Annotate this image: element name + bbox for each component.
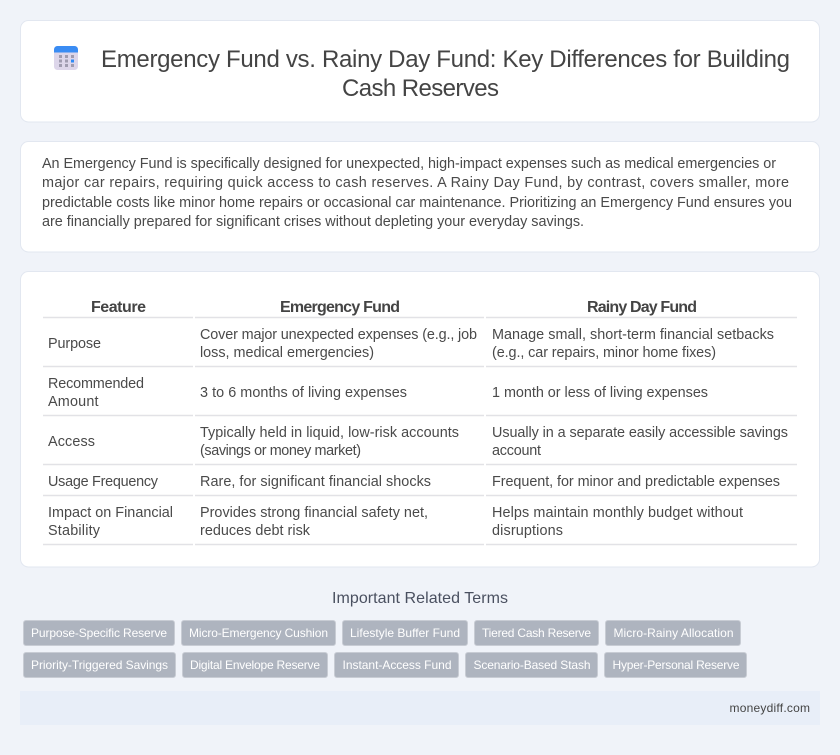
row: usage frequency (48, 474, 780, 490)
chip (334, 652, 458, 678)
chip (182, 620, 336, 646)
chip (604, 652, 746, 678)
footer source text: moneydiff.com (730, 701, 810, 715)
description text: are financially prepared for significant crises without depleting your everyday savings. (42, 214, 584, 230)
title: Emergency Fund vs. Rainy Day Fund: Key Differences for Building (101, 46, 790, 73)
row: access: Usually in a separate easily accessible savings (492, 425, 788, 441)
row: usage frequency: Usage Frequency (48, 474, 159, 490)
description text: An Emergency Fund is specifically designed for unexpected, high-impact expenses such as medical emergencies or (42, 156, 776, 172)
chip (24, 620, 174, 646)
description text: major car repairs, requiring quick access to cash reserves. A Rainy Day Fund, by contrast, covers smaller, more (42, 175, 789, 191)
chip: Instant-Access Fund (342, 658, 452, 672)
chip: Tiered Cash Reserve (482, 626, 591, 640)
row: impact on financial stability: Helps maintain monthly budget without (492, 505, 743, 521)
chip (474, 620, 598, 646)
chip (24, 652, 176, 678)
row: purpose: Cover major unexpected expenses (e.g., job (200, 327, 477, 343)
row: access: account (492, 443, 541, 459)
row: access: Access (48, 434, 95, 450)
chip: Micro-Rainy Allocation (614, 626, 734, 640)
row: recommended amount: Amount (48, 394, 98, 410)
title: Cash Reserves (342, 75, 499, 102)
table header row: Rainy Day Fund (587, 299, 697, 316)
row: impact on financial stability: Provides strong financial safety net, (200, 505, 428, 521)
row: recommended amount: 1 month or less of living expenses (492, 385, 708, 401)
table header row: Emergency Fund (280, 299, 400, 316)
row: purpose (48, 327, 774, 361)
table header row (91, 299, 697, 316)
row: purpose: Manage small, short-term financial setbacks (492, 327, 774, 343)
header panel (20, 20, 820, 122)
chip: Priority-Triggered Savings (31, 658, 168, 672)
row: recommended amount (48, 376, 708, 410)
row: purpose: (e.g., car repairs, minor home fixes) (492, 345, 716, 361)
comparison table panel (20, 272, 820, 567)
chip: Digital Envelope Reserve (190, 658, 320, 672)
row: recommended amount: Recommended (48, 376, 144, 392)
row: impact on financial stability: Impact on Financial (48, 505, 173, 521)
row: access: Typically held in liquid, low-risk accounts (200, 425, 459, 441)
related terms chips (24, 620, 746, 678)
chip (342, 620, 468, 646)
description text (42, 156, 792, 230)
description text: predictable costs like minor home repairs or occasional car maintenance. Prioritizing an Emergency Fund ensures you (42, 195, 792, 211)
row: usage frequency: Frequent, for minor and predictable expenses (492, 474, 780, 490)
heading: important related terms: Important Related Terms (332, 590, 508, 607)
chip: Hyper-Personal Reserve (612, 658, 740, 672)
chip: Purpose-Specific Reserve (31, 626, 167, 640)
chip: Micro-Emergency Cushion (189, 626, 328, 640)
description panel (20, 142, 820, 252)
row: purpose: loss, medical emergencies) (200, 345, 374, 361)
icon: calendar (54, 46, 78, 70)
row: access: (savings or money market) (200, 443, 361, 459)
row: access (48, 425, 788, 459)
table header row: Feature (91, 299, 146, 316)
chip (466, 652, 598, 678)
row: purpose: Purpose (48, 336, 101, 352)
row: recommended amount: 3 to 6 months of living expenses (200, 385, 407, 401)
row: usage frequency: Rare, for significant financial shocks (200, 474, 431, 490)
chip: Scenario-Based Stash (474, 658, 590, 672)
row: impact on financial stability: disruptions (492, 523, 563, 539)
footer band (20, 691, 820, 725)
row: impact on financial stability (48, 505, 743, 539)
row: impact on financial stability: reduces debt risk (200, 523, 311, 539)
title (101, 46, 790, 102)
chip (606, 620, 740, 646)
chip (182, 652, 328, 678)
chip: Lifestyle Buffer Fund (350, 626, 460, 640)
row: impact on financial stability: Stability (48, 523, 101, 539)
